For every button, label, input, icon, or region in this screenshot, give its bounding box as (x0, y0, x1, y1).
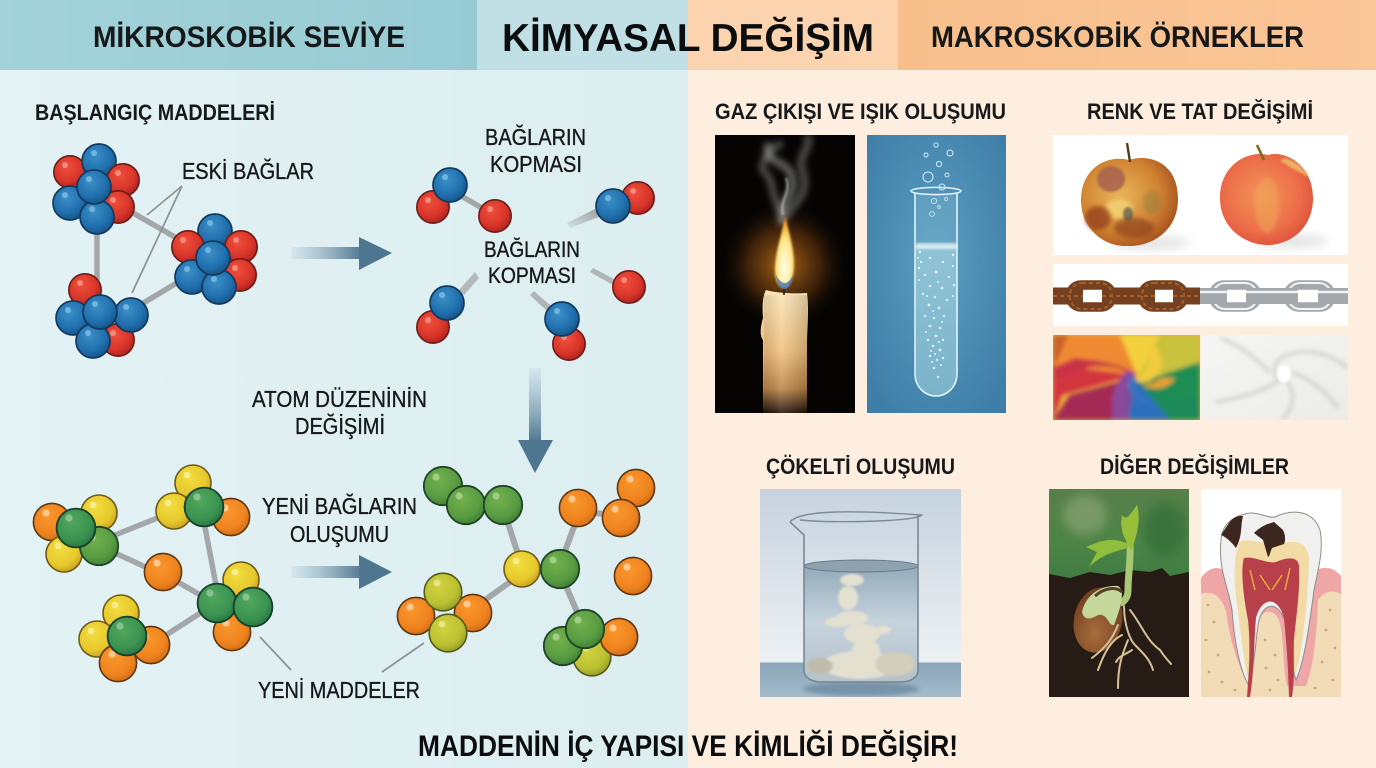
seed (1074, 587, 1122, 653)
label: new bonds formed: YENİ BAĞLARIN (262, 493, 417, 519)
heading: other changes: DİĞER DEĞİŞİMLER (1100, 454, 1289, 479)
gum (1201, 568, 1341, 697)
label: atom rearrangement (252, 386, 427, 439)
decay spots (1221, 516, 1243, 548)
label: bond breaking top (485, 124, 586, 177)
photo: beaker with precipitate (760, 489, 961, 697)
water (804, 561, 918, 682)
arrow: to new substances (291, 555, 392, 589)
rust chain (1070, 285, 1184, 307)
leaves (1086, 540, 1128, 567)
heading: macroscopic examples: MAKROSKOBİK ÖRNEKLER (931, 21, 1304, 54)
cluster C (198, 562, 272, 651)
new molecules before arrow (33, 465, 272, 682)
wick (783, 289, 785, 295)
cluster D (79, 595, 170, 682)
flame (775, 216, 794, 288)
label: bond breaking top: KOPMASI (490, 151, 582, 177)
soil (1049, 568, 1189, 697)
photo: bubbling test tube (867, 135, 1006, 413)
photo: rotten and fresh apple (1053, 135, 1348, 255)
label: new bonds formed (262, 493, 417, 547)
dentin (1235, 540, 1309, 680)
pulp (1242, 558, 1299, 697)
starting molecules group (53, 144, 257, 358)
label: old bonds: ESKİ BAĞLAR (182, 158, 314, 184)
cluster A (33, 495, 118, 572)
cluster B (156, 465, 250, 536)
background: microscopic side (0, 70, 688, 768)
rising bubbles (923, 143, 953, 216)
tube (915, 193, 957, 396)
title band (477, 0, 898, 70)
liquid bubbles (917, 251, 955, 378)
steel chain (1213, 285, 1331, 307)
precipitate plume (807, 574, 915, 679)
roots (1092, 606, 1171, 688)
molecule cluster 3 (56, 274, 148, 358)
bottom statement: MADDENİN İÇ YAPISI VE KİMLİĞİ DEĞİŞİR! (418, 729, 958, 763)
photo: germinating seed (1049, 489, 1189, 697)
photo: white fabric (1201, 335, 1348, 420)
arrow: to bond breaking (291, 237, 392, 270)
label: starting substances: BAŞLANGIÇ MADDELERİ (35, 100, 275, 125)
label: atom rearrangement: ATOM DÜZENİNİN (252, 386, 427, 412)
heading: gas and light: GAZ ÇIKIŞI VE IŞIK OLUŞUMU (715, 99, 1006, 124)
label: new bonds formed: OLUŞUMU (290, 521, 389, 547)
label: bond breaking top: BAĞLARIN (485, 124, 586, 150)
photo: tie-dye fabric (1053, 335, 1200, 420)
molecule cluster 1 (53, 144, 139, 234)
photo: rusty and shiny chain (1053, 264, 1348, 326)
heading: microscopic level: MİKROSKOBİK SEVİYE (93, 21, 405, 54)
photo: burning candle (715, 135, 855, 413)
rotten apple (1081, 158, 1178, 246)
bone specks (1205, 604, 1336, 691)
background: macroscopic side (688, 70, 1376, 768)
photo: decayed tooth diagram (1201, 489, 1341, 697)
heading: colour and taste change: RENK VE TAT DEĞİŞİMİ (1087, 99, 1313, 124)
smoke (762, 138, 808, 222)
label: bond breaking middle (484, 237, 580, 288)
fresh apple (1220, 154, 1313, 245)
final new molecules (397, 467, 655, 676)
candle body (761, 290, 808, 413)
heading: precipitate: ÇÖKELTİ OLUŞUMU (766, 454, 955, 479)
header band: macroscopic (898, 0, 1376, 70)
stem (1118, 543, 1130, 604)
label: atom rearrangement: DEĞİŞİMİ (295, 413, 385, 439)
arrow: down (518, 368, 553, 473)
label: bond breaking middle: KOPMASI (488, 263, 576, 288)
header band: microscopic (0, 0, 477, 70)
single orange atom (144, 553, 182, 591)
glass outline (790, 515, 918, 682)
leader lines: new substances (260, 637, 424, 672)
label: bond breaking middle: BAĞLARIN (484, 237, 580, 262)
label: new substances: YENİ MADDELER (258, 677, 420, 703)
bone (1201, 592, 1341, 697)
broken bond molecules (417, 168, 654, 360)
tooth enamel (1220, 512, 1321, 684)
molecule cluster 2 (172, 214, 257, 304)
leader lines: old bonds (132, 186, 182, 293)
old bonds (97, 210, 180, 308)
main title: KİMYASAL DEĞİŞİM (502, 16, 874, 60)
